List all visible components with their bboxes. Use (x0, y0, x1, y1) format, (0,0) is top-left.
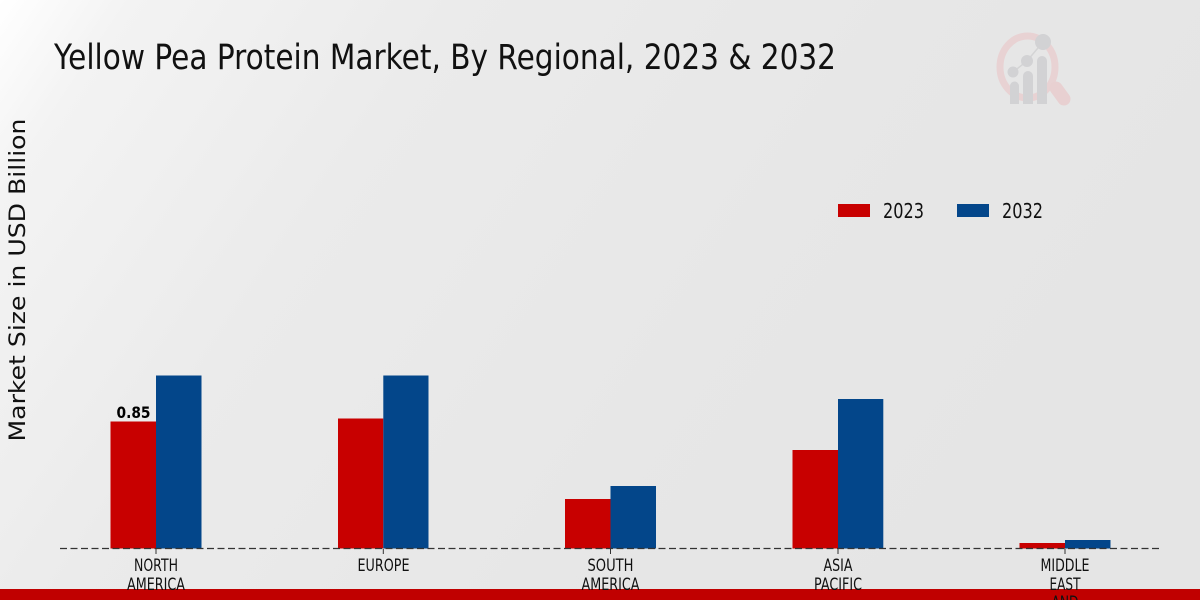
data label: North America 2023: 0.85 (116, 403, 150, 422)
legend item: 2032: 2032 (1002, 199, 1043, 223)
x axis label: North America: NORTH (134, 556, 178, 575)
bars: Middle East and Africa (1020, 540, 1110, 548)
legend (838, 199, 1043, 223)
legend item: 2032 (957, 199, 1043, 223)
x axis label: Middle East and Africa: EAST (1050, 575, 1081, 594)
x axis label: North America: AMERICA (127, 575, 186, 594)
x axis label: North America (127, 556, 186, 594)
bars: North America (110, 376, 202, 548)
x axis baseline (60, 548, 1159, 550)
x axis label: Asia Pacific (814, 556, 862, 594)
x axis label: Middle East and Africa: MIDDLE (1040, 556, 1090, 575)
legend item: 2023: 2023 (883, 199, 924, 223)
bars: Asia Pacific (792, 399, 883, 548)
title: Yellow Pea Protein Market, By Regional, 2023 & 2032 (53, 38, 836, 78)
x axis label: South America: SOUTH (588, 556, 634, 575)
footer bar (0, 589, 1200, 600)
legend item: 2023 (838, 199, 924, 223)
x axis label: Europe: EUROPE (358, 556, 410, 575)
y axis label: Market Size in USD Billion (5, 118, 31, 442)
x axis label: South America (582, 556, 640, 594)
x axis label: Asia Pacific: ASIA (824, 556, 853, 575)
x axis label: Middle East and Africa (1040, 556, 1090, 600)
bars: Europe (338, 376, 428, 548)
icon: watermark logo magnifier with chart (1000, 34, 1064, 104)
bar chart (60, 376, 1159, 600)
x axis label: South America: AMERICA (582, 575, 640, 594)
x axis label: Asia Pacific: PACIFIC (814, 575, 862, 594)
bars: South America (565, 486, 656, 548)
